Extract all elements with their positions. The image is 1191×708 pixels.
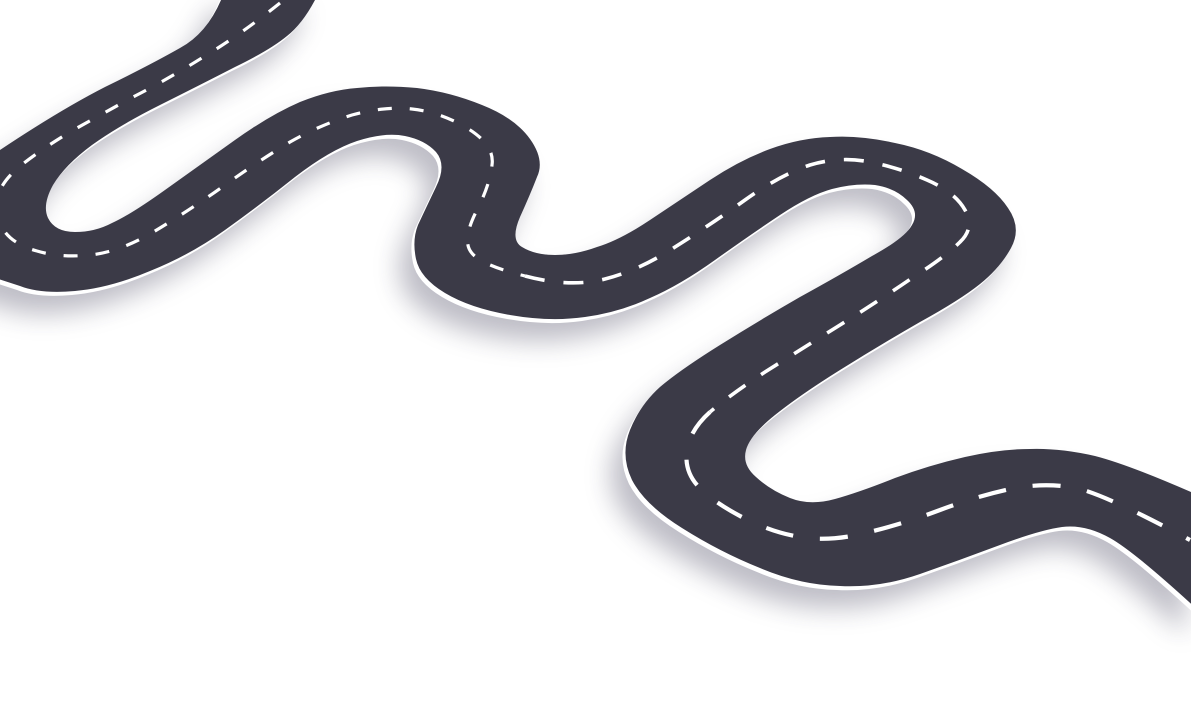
- dashed centre line: [0, 3, 1190, 540]
